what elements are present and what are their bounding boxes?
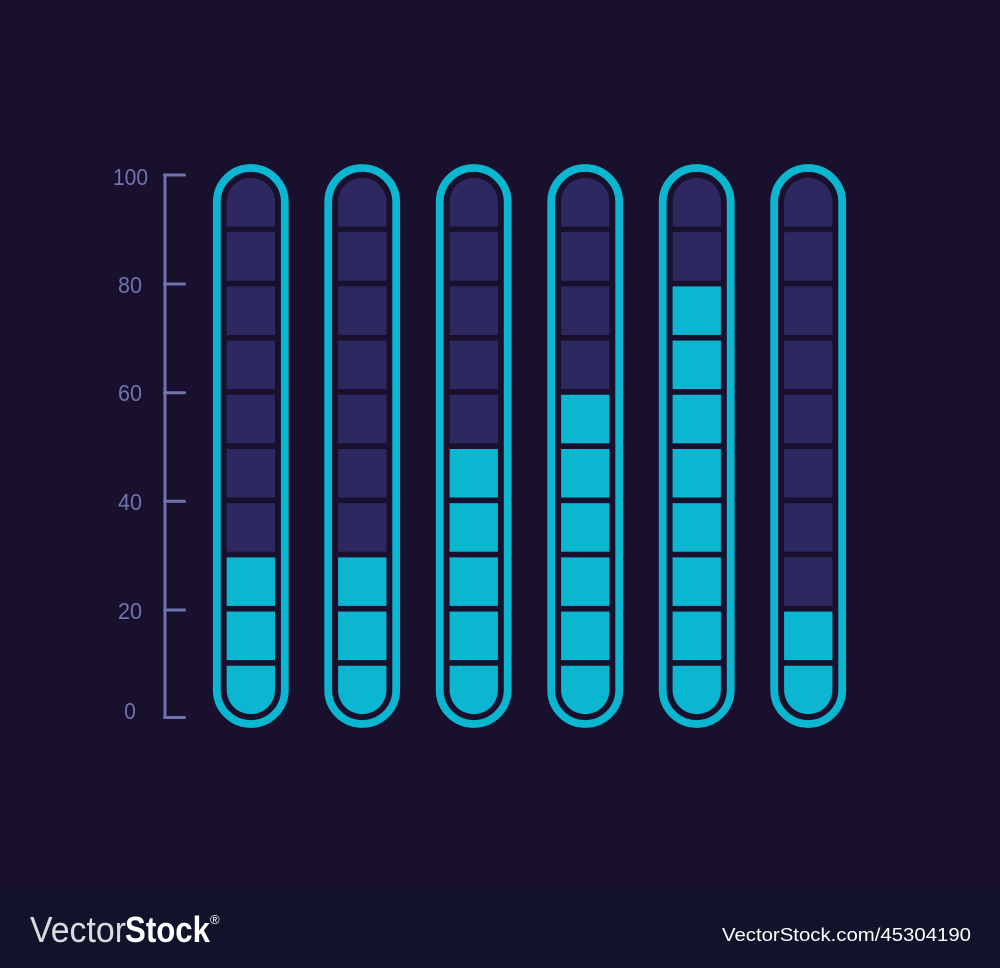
bar 2: value 30 — [328, 168, 396, 724]
VectorStock logo — [30, 909, 220, 950]
axis labels: 100 — [113, 164, 148, 190]
bar 6: value 20 — [774, 168, 842, 724]
axis labels: 40 — [118, 489, 142, 515]
axis labels: 60 — [118, 380, 142, 406]
axis labels — [113, 164, 148, 724]
axis labels: 80 — [118, 272, 142, 298]
footer band — [0, 888, 1000, 968]
axis labels: 20 — [118, 598, 142, 624]
VectorStock logo: ® — [210, 912, 220, 927]
axis labels: 0 — [124, 698, 136, 724]
VectorStock logo: Stock — [125, 909, 211, 950]
bar 1: value 30 — [217, 168, 285, 724]
y axis — [113, 164, 184, 724]
VectorStock logo: Vector — [30, 909, 126, 950]
bar 4: value 60 — [551, 168, 619, 724]
image id: VectorStock.com/45304190 — [722, 924, 971, 945]
bar 3: value 50 — [440, 168, 508, 724]
bar 5: value 80 — [663, 168, 731, 724]
